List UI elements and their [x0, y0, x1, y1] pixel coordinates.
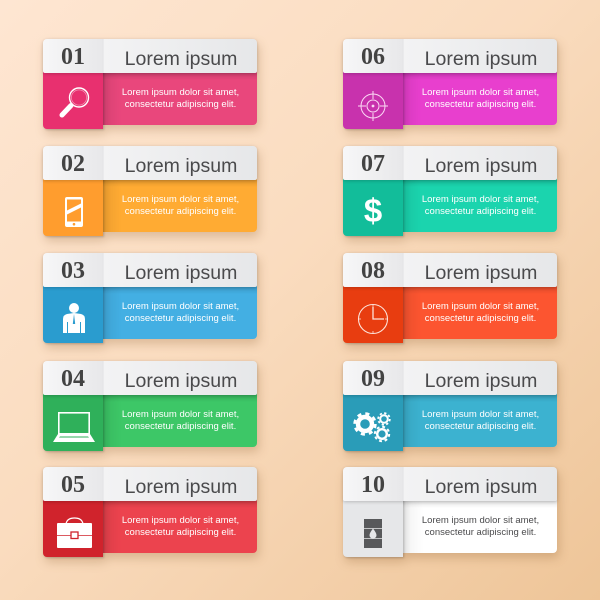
- description 06: [422, 86, 539, 110]
- icon panel 05: [43, 495, 103, 557]
- description 03: consectetur adipiscing elit.: [125, 313, 236, 324]
- description 05: Lorem ipsum dolor sit amet,: [122, 514, 239, 526]
- header 05: [43, 467, 257, 501]
- description 01: Lorem ipsum dolor sit amet,: [122, 86, 239, 98]
- description 03: Lorem ipsum dolor sit amet,: [122, 300, 239, 312]
- description 02: [122, 194, 239, 217]
- description 05: [122, 514, 239, 538]
- title 09: Lorem ipsum: [425, 370, 537, 392]
- icon panel 08: [343, 281, 403, 343]
- description 01: consectetur adipiscing elit.: [125, 99, 236, 110]
- icon panel 09: [343, 389, 403, 451]
- description 07: Lorem ipsum dolor sit amet,: [422, 194, 539, 204]
- description 04: [122, 408, 239, 432]
- icon panel 10: [343, 495, 403, 557]
- number 03: 03: [61, 258, 85, 284]
- description 06: Lorem ipsum dolor sit amet,: [422, 86, 539, 98]
- card 04: laptop: [40, 360, 263, 460]
- card 08: clock: [340, 252, 563, 352]
- description 02: consectetur adipiscing elit.: [125, 206, 236, 217]
- number 09: 09: [361, 366, 385, 392]
- header 01: [43, 39, 257, 73]
- title 07: Lorem ipsum: [425, 155, 537, 177]
- card 03: businessman: [40, 252, 263, 352]
- header 08: [343, 253, 557, 287]
- description 08: [422, 300, 539, 324]
- card 06: target: [340, 38, 563, 138]
- header 09: [343, 361, 557, 395]
- card 02: phone: [40, 145, 264, 246]
- header 02: [43, 146, 257, 180]
- title 05: Lorem ipsum: [125, 476, 237, 498]
- header 10: [343, 467, 557, 501]
- icon panel 07: $: [364, 192, 382, 229]
- description 08: consectetur adipiscing elit.: [425, 313, 536, 324]
- description 01: [122, 86, 239, 110]
- description 07: consectetur adipiscing elit.: [425, 206, 536, 217]
- icon panel 02: [43, 174, 103, 236]
- icon panel 03: [43, 281, 103, 343]
- description 02: Lorem ipsum dolor sit amet,: [122, 194, 239, 204]
- description 05: consectetur adipiscing elit.: [125, 527, 236, 538]
- description 09: [422, 408, 539, 432]
- header 06: [343, 39, 557, 73]
- icon panel 04: [43, 389, 103, 451]
- number 04: 04: [61, 366, 85, 392]
- number 06: 06: [361, 44, 385, 70]
- title 06: Lorem ipsum: [425, 48, 537, 70]
- description 04: consectetur adipiscing elit.: [125, 421, 236, 432]
- card 09: gears: [340, 360, 563, 460]
- header 03: [43, 253, 257, 287]
- icon panel 01: [43, 67, 103, 129]
- description 10: consectetur adipiscing elit.: [425, 527, 536, 538]
- card 07: dollar: [340, 145, 563, 246]
- description 06: consectetur adipiscing elit.: [425, 99, 536, 110]
- card 10: oil barrel: [340, 466, 562, 566]
- description 07: [422, 194, 539, 217]
- icon panel 06: [343, 67, 403, 129]
- title 01: Lorem ipsum: [125, 48, 237, 70]
- title 08: Lorem ipsum: [425, 262, 537, 284]
- card 05: briefcase: [40, 466, 263, 566]
- description 10: [422, 514, 539, 538]
- title 03: Lorem ipsum: [125, 262, 237, 284]
- number 07: 07: [361, 150, 385, 176]
- number 08: 08: [361, 258, 385, 284]
- description 04: Lorem ipsum dolor sit amet,: [122, 408, 239, 420]
- title 02: Lorem ipsum: [125, 155, 237, 177]
- title 04: Lorem ipsum: [125, 370, 237, 392]
- number 02: 02: [61, 150, 85, 176]
- description 08: Lorem ipsum dolor sit amet,: [422, 300, 539, 312]
- description 10: Lorem ipsum dolor sit amet,: [422, 514, 539, 526]
- description 09: Lorem ipsum dolor sit amet,: [422, 408, 539, 420]
- header 07: [343, 146, 557, 180]
- description 03: [122, 300, 239, 324]
- number 10: 10: [361, 472, 385, 498]
- number 01: 01: [61, 44, 85, 70]
- header 04: [43, 361, 257, 395]
- title 10: Lorem ipsum: [425, 476, 537, 498]
- icon panel 07: [343, 174, 403, 236]
- card 01: magnifier: [40, 38, 264, 138]
- description 09: consectetur adipiscing elit.: [425, 421, 536, 432]
- number 05: 05: [61, 472, 85, 498]
